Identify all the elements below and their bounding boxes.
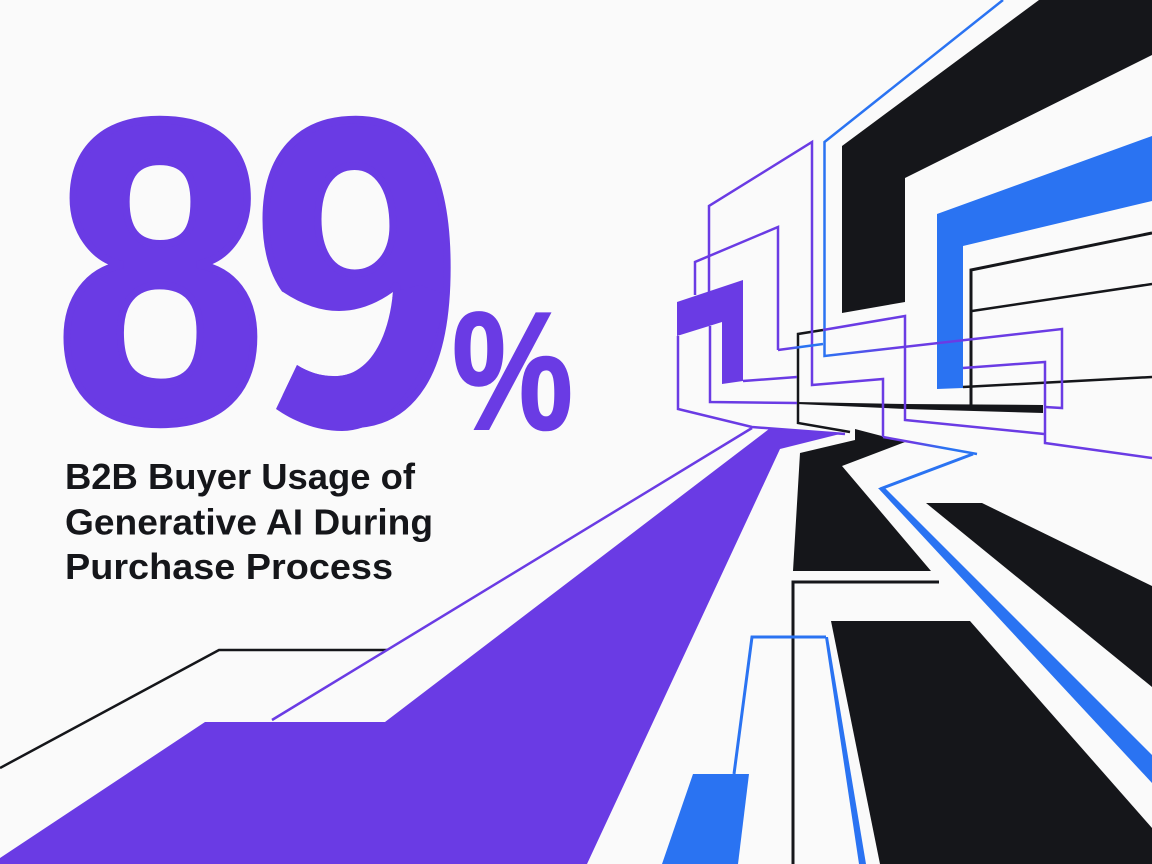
black L line xyxy=(793,582,939,864)
purple second line xyxy=(695,227,778,350)
blue tapered stripe xyxy=(878,488,1152,783)
blue to purple line xyxy=(824,329,1062,408)
black right line 3 xyxy=(963,377,1152,387)
blue lines bottom xyxy=(734,637,826,774)
black right frame xyxy=(971,233,1152,405)
black central arrow xyxy=(793,429,931,571)
purple small bracket xyxy=(677,280,743,384)
purple outer line xyxy=(709,142,883,437)
subtitle line 1: B2B Buyer Usage of xyxy=(65,456,416,497)
purple to blue line xyxy=(883,437,977,454)
black bottom floor xyxy=(831,621,1152,864)
blue wall xyxy=(937,136,1152,389)
black tapered wedge xyxy=(797,402,1043,413)
digit 9 tail xyxy=(276,285,447,431)
digit 8: 8 xyxy=(55,30,265,511)
purple road xyxy=(0,429,840,864)
black line bottom left xyxy=(0,650,387,768)
purple bracket connector 1 xyxy=(743,377,797,381)
blue top line xyxy=(824,0,1003,344)
subtitle line 3: Purchase Process xyxy=(65,546,393,587)
digit 9: 9 xyxy=(253,32,461,512)
black right line 2 xyxy=(972,284,1152,311)
percent sign: % xyxy=(452,278,573,465)
purple diagonal line xyxy=(272,428,752,720)
subtitle line 2: Generative AI During xyxy=(65,502,433,542)
blue arrow line xyxy=(880,454,973,489)
black central frame xyxy=(798,330,850,432)
subtitle xyxy=(65,456,433,587)
purple right line xyxy=(963,362,1152,458)
purple to blue short line xyxy=(778,344,823,350)
purple road edge xyxy=(678,336,845,434)
blue tapered line xyxy=(825,637,866,864)
big statistic: 89% xyxy=(55,30,573,512)
black top wall xyxy=(842,0,1152,313)
blue bottom block xyxy=(662,774,749,864)
digit 9 tail backdrop xyxy=(262,285,393,445)
black right stripe xyxy=(926,503,1152,687)
purple bracket connector 2 xyxy=(710,326,797,403)
purple central line xyxy=(823,316,1044,434)
